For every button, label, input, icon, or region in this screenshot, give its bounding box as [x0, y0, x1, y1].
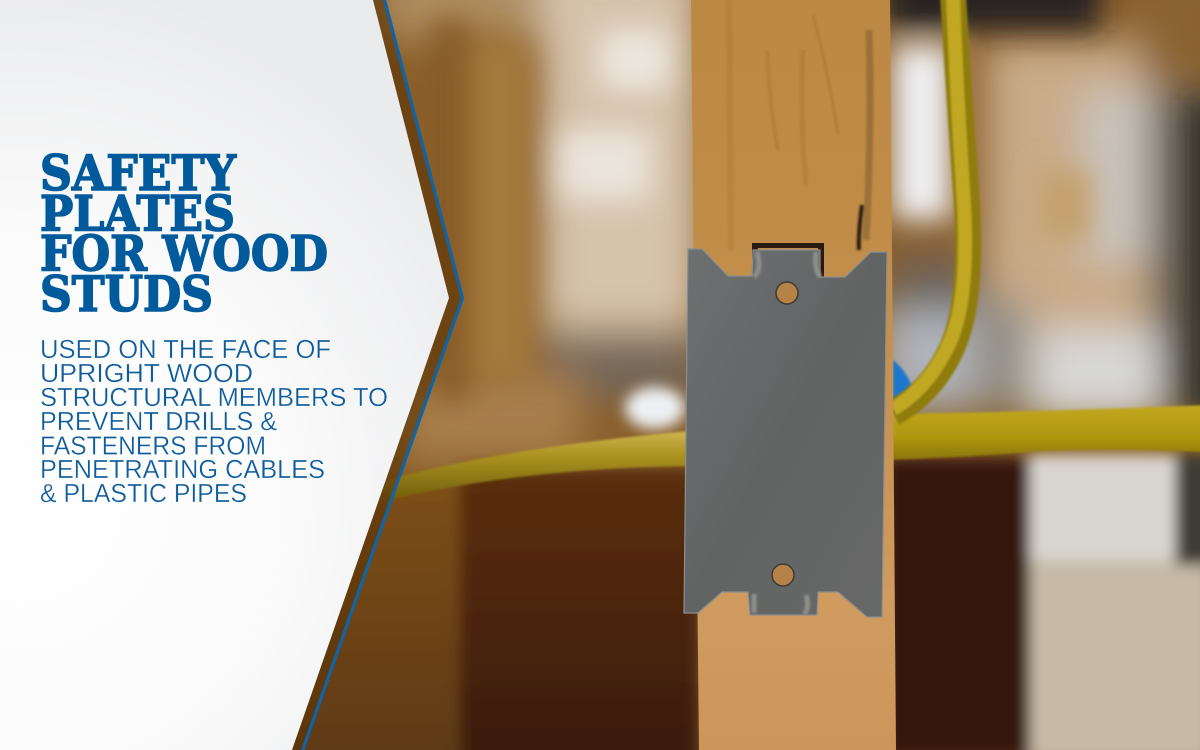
blue object behind cable — [893, 360, 915, 404]
description text: & PLASTIC PIPES — [40, 478, 247, 508]
description text: UPRIGHT WOOD — [40, 358, 253, 388]
top tab highlight — [754, 252, 820, 277]
bottom screw hole — [772, 564, 794, 586]
top screw hole — [776, 282, 798, 304]
title: PLATES — [40, 184, 235, 242]
description text: USED ON THE FACE OF — [40, 334, 331, 364]
wood stud — [691, 0, 896, 750]
title — [40, 144, 328, 323]
blue chevron line — [302, 0, 462, 750]
title: FOR WOOD — [40, 224, 328, 282]
white text panel — [0, 0, 449, 750]
safety plate — [684, 249, 887, 617]
description text: STRUCTURAL MEMBERS TO — [40, 382, 388, 412]
description text: PENETRATING CABLES — [40, 454, 325, 484]
description text: FASTENERS FROM — [40, 430, 266, 460]
title: STUDS — [40, 265, 213, 323]
yellow cable: left — [380, 431, 690, 502]
description text — [40, 334, 388, 508]
title: SAFETY — [40, 144, 237, 202]
description text: PREVENT DRILLS & — [40, 406, 277, 436]
brown translucent band — [290, 0, 464, 750]
bottom tab highlight — [754, 594, 808, 614]
yellow cable: right — [885, 405, 1200, 460]
yellow cable: vertical — [893, 0, 968, 413]
